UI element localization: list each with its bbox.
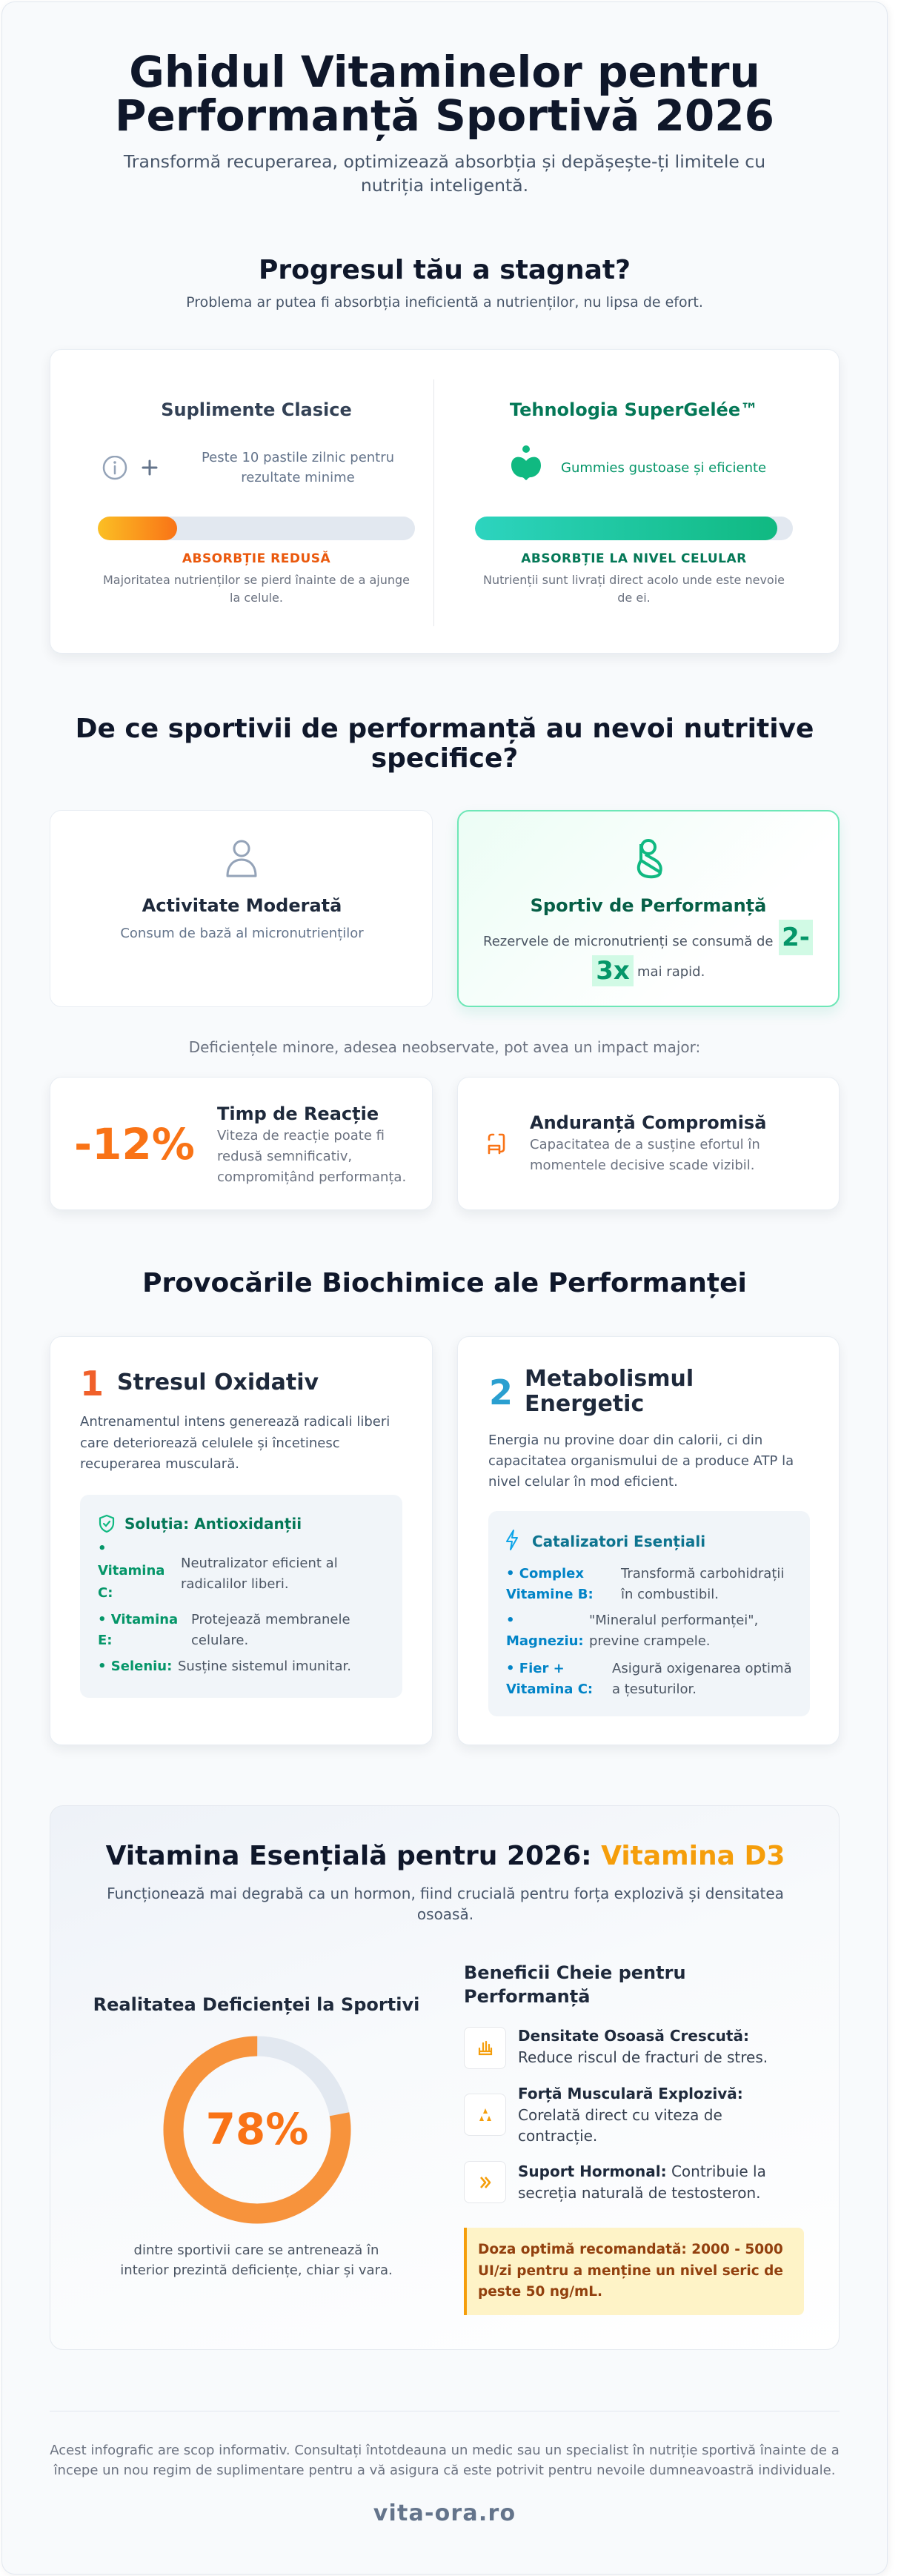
callout: optimal dose xyxy=(464,2228,804,2315)
benefit: bone density: Reduce riscul de fracturi de stres. xyxy=(518,2048,768,2066)
donut xyxy=(163,2036,351,2223)
heading: Stresul Oxidativ xyxy=(117,1370,319,1395)
text: Antrenamentul intens generează radicali liberi xyxy=(80,1414,390,1430)
text xyxy=(530,1137,760,1173)
item: fier + vitamina C: a țesuturilor. xyxy=(612,1682,697,1697)
icon: athlete xyxy=(637,839,662,879)
footer: brand: vita-ora.ro xyxy=(373,2500,516,2526)
item: vitamina E: celulare. xyxy=(191,1633,248,1648)
item: vitamina C xyxy=(98,1541,338,1601)
stat: 78%: 78% xyxy=(206,2104,308,2154)
title xyxy=(115,47,774,141)
label: absorbtie celular: ABSORBȚIE LA NIVEL CELULAR xyxy=(521,551,747,566)
heading: progresul a stagnat: Progresul tău a stagnat? xyxy=(259,255,631,285)
item: vitamina E xyxy=(98,1612,350,1648)
heading: Metabolismul xyxy=(525,1366,694,1392)
heading: realitatea: Realitatea Deficienței la Sportivi xyxy=(93,1994,419,2015)
icon: lightning xyxy=(506,1530,518,1550)
heading: Energetic xyxy=(525,1391,644,1417)
text: pastile: rezultate minime xyxy=(241,470,355,485)
item: complex B: Transformă carbohidrații xyxy=(621,1566,784,1581)
text: recuperarea musculară. xyxy=(80,1456,239,1472)
text: deficiente minore: Deficiențele minore, adesea neobservate, pot avea un impact major: xyxy=(189,1038,700,1056)
heading: Tehnologia SuperGelée: Tehnologia SuperGelée™ xyxy=(510,399,758,420)
heading: catalizatori: Catalizatori Esențiali xyxy=(532,1533,705,1550)
text: hormone xyxy=(107,1885,784,1923)
callout: optimal dose: UI/zi pentru a menține un nivel seric de xyxy=(478,2263,783,2278)
item: seleniu: • Seleniu: xyxy=(98,1659,172,1674)
caption: dintre sportivii care se antrenează în xyxy=(134,2243,379,2258)
item: complex B: în combustibil. xyxy=(621,1587,719,1602)
bar: low absorption xyxy=(98,517,415,540)
footer: disclaimer: începe un nou regim de suplimentare pentru a vă asigura că este potrivit pentru nevoile dumneavoastră individuale. xyxy=(54,2463,835,2478)
title: Ghidul Vitaminelor pentru xyxy=(129,47,760,97)
subtitle xyxy=(123,151,765,196)
heading xyxy=(525,1366,694,1417)
item: magneziu: Magneziu: xyxy=(506,1633,584,1649)
caption xyxy=(120,2243,393,2278)
item: complex B: Vitamine B: xyxy=(506,1587,594,1602)
panel: comparison xyxy=(50,349,840,654)
item: vitamina C: C: xyxy=(98,1585,113,1601)
benefit: hormonal support: Suport Hormonal: Contribuie la xyxy=(518,2162,766,2180)
icon: shield xyxy=(99,1515,114,1533)
list: key benefits xyxy=(464,1962,804,2315)
heading: Activitate Moderată xyxy=(142,895,342,916)
panel: activitate moderata xyxy=(50,810,433,1007)
heading: vitamina esentiala: Vitamina Esențială pentru 2026: Vitamina D3 xyxy=(106,1841,785,1871)
item: vitamina E: E: xyxy=(98,1633,113,1648)
text: compromițând performanța. xyxy=(217,1169,406,1185)
benefit: hormonal support xyxy=(464,2161,766,2203)
text: mai rapid: mai rapid. xyxy=(637,964,705,980)
heading: Suplimente Clasice: Suplimente Clasice xyxy=(161,399,352,420)
panel: vitamina D3 xyxy=(50,1805,840,2350)
heading: de ce sportivii xyxy=(76,714,814,774)
subtitle: Transformă recuperarea, optimizează absorbția și depășește-ți limitele cu xyxy=(124,151,765,172)
text: nivel celular în mod eficient. xyxy=(488,1474,678,1490)
text: reserves consumed: Rezervele de micronutrienți se consumă de xyxy=(483,934,774,949)
icon: info and plus xyxy=(102,456,157,480)
heading: beneficii xyxy=(464,1962,686,2007)
text: Capacitatea de a susține efortul în xyxy=(530,1137,760,1152)
callout: optimal dose: peste 50 ng/mL. xyxy=(478,2284,602,2300)
heading: de ce sportivii: specifice? xyxy=(371,743,518,774)
item: vitamina E: Protejează membranele xyxy=(191,1612,350,1627)
heading: beneficii: Performanță xyxy=(464,1986,590,2007)
text xyxy=(217,1128,406,1185)
text: pastile: Peste 10 pastile zilnic pentru xyxy=(202,450,394,465)
icon: person xyxy=(227,840,256,877)
item: complex B xyxy=(506,1566,784,1602)
benefit: hormonal support: secreția naturală de testosteron. xyxy=(518,2183,761,2201)
text: gummies: Gummies gustoase și eficiente xyxy=(561,460,766,476)
title: Performanță Sportivă 2026 xyxy=(115,90,774,141)
benefit: explosive strength xyxy=(464,2085,743,2145)
subheading: problema: Problema ar putea fi absorbția ineficientă a nutrienților, nu lipsa de efort. xyxy=(186,294,703,311)
heading: beneficii: Beneficii Cheie pentru xyxy=(464,1962,686,1983)
column: SuperGelee xyxy=(475,399,793,605)
subtitle: nutriția inteligentă. xyxy=(361,175,528,196)
label: absorbtie redusa: ABSORBȚIE REDUSĂ xyxy=(182,551,330,566)
item: magneziu: • xyxy=(506,1613,515,1628)
callout: optimal dose: Doza optimă recomandată: 2000 - 5000 xyxy=(478,2242,783,2257)
box: catalysts xyxy=(488,1511,810,1716)
item: magneziu xyxy=(506,1613,758,1649)
badge: 3x: 3x xyxy=(596,956,630,986)
item: fier + vitamina C: • Fier + xyxy=(506,1661,565,1676)
badge: 2- xyxy=(779,920,813,955)
icon: battery low xyxy=(488,1134,505,1155)
item: seleniu xyxy=(98,1659,351,1674)
item: vitamina C: Vitamina xyxy=(98,1563,164,1579)
number 1: 1 xyxy=(80,1364,104,1404)
badge: 2-: 2- xyxy=(782,923,810,952)
item: fier + vitamina C: Asigură oxigenarea optimă xyxy=(612,1661,792,1676)
item: fier + vitamina C xyxy=(506,1661,792,1697)
panel: stresul oxidativ xyxy=(50,1336,433,1745)
text: nutrients lost: la celule. xyxy=(230,591,283,605)
text: redusă semnificativ, xyxy=(217,1149,352,1164)
item: magneziu: previne crampele. xyxy=(589,1633,711,1649)
caption: interior prezintă deficiențe, chiar și vara. xyxy=(120,2263,393,2278)
heading: provocarile biochimice: Provocările Biochimice ale Performanței xyxy=(142,1268,747,1298)
item: vitamina C: • xyxy=(98,1541,107,1556)
panel: sportiv de performanta xyxy=(457,810,840,1007)
text: care deteriorează celulele și încetinesc xyxy=(80,1435,340,1451)
chart: deficiency donut xyxy=(93,1994,419,2278)
text: delivered directly xyxy=(483,573,785,605)
text xyxy=(488,1433,794,1490)
bar: high absorption xyxy=(475,517,793,540)
text: hormone: Funcționează mai degrabă ca un hormon, fiind crucială pentru forța explozivă și densitatea xyxy=(107,1885,784,1902)
benefit: bone density: Densitate Osoasă Crescută: xyxy=(518,2027,749,2045)
panel: timp de reactie xyxy=(50,1077,433,1210)
item: vitamina C: Neutralizator eficient al xyxy=(181,1556,338,1571)
column: classic supplements xyxy=(98,399,415,605)
number 2: 2 xyxy=(489,1372,513,1413)
text: hormone: osoasă. xyxy=(417,1905,473,1923)
heading: Sportiv de Performanță xyxy=(531,895,766,916)
text xyxy=(80,1414,390,1472)
item: fier + vitamina C: Vitamina C: xyxy=(506,1682,593,1697)
text: Consum de bază al micronutrienților xyxy=(120,926,364,941)
text: Energia nu provine doar din calorii, ci din xyxy=(488,1433,762,1448)
item: seleniu: Susține sistemul imunitar. xyxy=(178,1659,351,1674)
text: pastile xyxy=(202,450,394,485)
item: magneziu: "Mineralul performanței", xyxy=(589,1613,758,1628)
box: antioxidants xyxy=(80,1495,402,1698)
heading: solutia: Soluția: Antioxidanții xyxy=(124,1515,302,1533)
benefit: explosive strength: Forță Musculară Explozivă: xyxy=(518,2085,743,2102)
stat: -12%: -12% xyxy=(74,1119,195,1169)
text: nutrients lost xyxy=(103,573,410,605)
footer: disclaimer: Acest infografic are scop informativ. Consultați întotdeauna un medic sau un specialist în nutriție sportivă înainte de a xyxy=(50,2443,840,2458)
benefit: bone density xyxy=(464,2027,768,2069)
footer: disclaimer xyxy=(50,2443,840,2478)
item: complex B: • Complex xyxy=(506,1566,584,1581)
benefit: explosive strength: Corelată direct cu viteza de xyxy=(518,2106,722,2124)
benefit: explosive strength: contracție. xyxy=(518,2127,597,2145)
text: Viteza de reacție poate fi xyxy=(217,1128,385,1143)
panel: anduranta compromisa xyxy=(457,1077,840,1210)
item: vitamina E: • Vitamina xyxy=(98,1612,178,1627)
text: capacitatea organismului de a produce ATP la xyxy=(488,1453,794,1469)
heading: Anduranță Compromisă xyxy=(530,1112,766,1133)
item: vitamina C: radicalilor liberi. xyxy=(181,1576,289,1592)
icon: gummy xyxy=(511,445,541,480)
text: delivered directly: de ei. xyxy=(617,591,651,605)
text: nutrients lost: Majoritatea nutrienților se pierd înainte de a ajunge xyxy=(103,573,410,587)
text: momentele decisive scade vizibil. xyxy=(530,1158,754,1173)
heading: de ce sportivii: De ce sportivii de performanță au nevoi nutritive xyxy=(76,714,814,744)
heading: Timp de Reacție xyxy=(217,1103,379,1124)
panel: metabolismul energetic xyxy=(457,1336,840,1745)
text: delivered directly: Nutrienții sunt livrați direct acolo unde este nevoie xyxy=(483,573,785,587)
